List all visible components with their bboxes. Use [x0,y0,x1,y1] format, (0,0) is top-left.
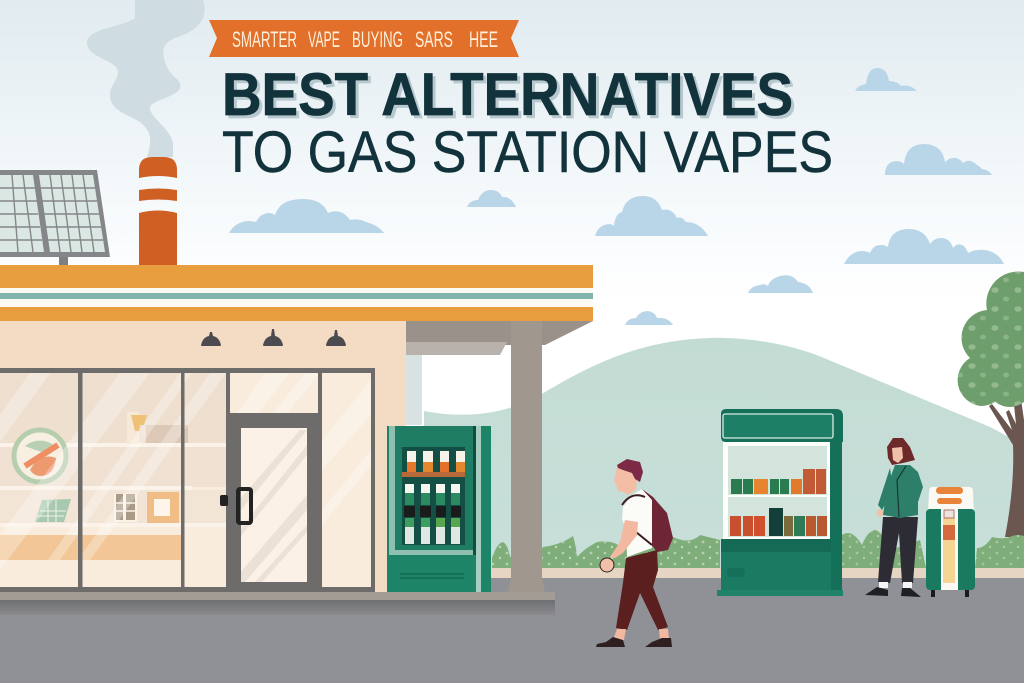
shelf box top [127,412,188,444]
lamp 2 [263,329,283,346]
smoke plume [87,0,205,157]
woman socks [879,582,912,588]
machine shelf [402,472,465,477]
door reflections [241,430,307,582]
platform front [0,600,555,615]
cloud 5 [467,190,516,207]
kiosk header [721,409,843,442]
ribbon banner [209,20,519,57]
dispenser orange pills [936,487,963,494]
head [614,467,637,495]
product kiosk [717,409,843,596]
store wall [0,320,406,592]
ribbon text: VAPE [308,27,340,52]
kiosk sign panel [723,414,833,438]
backpack [642,489,673,552]
kiosk base [721,539,831,590]
ribbon text: SARS [415,27,453,52]
cloud 7 [748,275,813,293]
shelf orange frame [147,492,179,523]
green stack [35,499,71,522]
hill [424,338,1024,580]
chimney top [139,157,177,178]
cloud 6 [595,196,708,236]
cloud 1 [855,68,917,91]
hair [617,459,643,482]
door handle [220,489,251,523]
kiosk foot [717,590,843,596]
ribbon text: BUYING [352,27,403,52]
vending machine [387,426,491,592]
kiosk top shelf products [731,469,826,494]
machine light frame [389,426,395,555]
canopy [958,271,1024,407]
title [222,61,833,185]
machine body [387,426,491,592]
kiosk case [723,442,830,540]
kiosk base pill [727,568,745,577]
tree [958,271,1024,537]
canopy soffit [406,342,507,355]
sidewalk strip [424,568,1024,579]
ribbon text: SMARTER [232,27,297,52]
no vape sign [14,430,66,482]
panel cells right [39,175,105,252]
interior mid tone [0,447,230,487]
canopy spots [958,271,1024,407]
woman hand [876,510,884,516]
woman pants [878,517,918,583]
dispenser body [926,509,975,590]
kiosk bottom shelf products [730,508,827,536]
jacket seam [897,466,906,517]
pants [616,550,668,630]
lamp 1 [201,332,221,346]
hedge right [842,530,1024,568]
glass reflections [0,373,371,570]
wall lamps [201,329,346,346]
dispenser strip [943,518,955,583]
trunk and branches [989,392,1024,537]
dispenser wheels [931,590,969,597]
interior upper tone [0,373,230,445]
shirt [622,489,652,557]
clouds [229,68,1004,325]
woman face [892,447,903,463]
brick column patch [406,355,422,425]
machine upper face [395,426,473,550]
pavement [0,578,1024,683]
interior lower tone [0,490,230,525]
forearm [610,520,638,558]
kiosk right column [830,430,842,590]
gas station building [0,265,593,615]
window frame [0,368,375,592]
dispenser label [941,509,958,590]
ankles [613,629,669,640]
orange counter [0,535,181,560]
shoes [596,637,672,647]
panel frame [0,170,110,257]
title line 1: BEST ALTERNATIVES [222,61,793,128]
roof teal stripe [0,293,593,299]
cloud 4 [229,199,384,233]
interior [0,373,371,570]
lower row packs [404,484,461,544]
roof top band [0,265,593,288]
panel cells left [0,175,44,252]
ribbon shape [209,20,519,57]
cloud 3 [844,229,1004,264]
machine vent lines [400,574,464,578]
roof lower band [0,307,593,321]
hedge left [492,535,720,568]
roof white fascia [0,287,593,308]
recycling dispenser [926,487,975,597]
shelves [0,443,228,527]
woman hair [887,438,915,465]
woman jacket [883,465,923,518]
storefront window [0,368,375,592]
person walking [596,459,673,647]
cloud 8 [625,311,673,325]
glass [0,368,375,592]
dispenser tags [944,510,954,518]
lamp 3 [326,330,346,346]
woman standing [865,438,923,597]
panel grid [0,175,103,252]
platform top [0,592,555,600]
chimney [139,157,177,265]
solar panel [0,170,110,265]
shelf window item [114,494,137,522]
support column [508,321,545,592]
hand [600,558,614,572]
canopy underside [406,321,593,345]
chimney band [139,188,177,201]
cloud 2 [885,144,992,175]
panel post [59,255,68,265]
dispenser top [928,487,974,512]
door glass [226,413,322,592]
ribbon text: HEE [469,27,498,52]
title line 2: TO GAS STATION VAPES [222,120,833,185]
top row packs [407,451,465,472]
woman arm [878,468,893,510]
sky background [0,0,1024,300]
backpack strap [622,495,652,545]
machine display [402,447,465,545]
chimney base [139,210,177,265]
woman shoes [865,587,921,597]
